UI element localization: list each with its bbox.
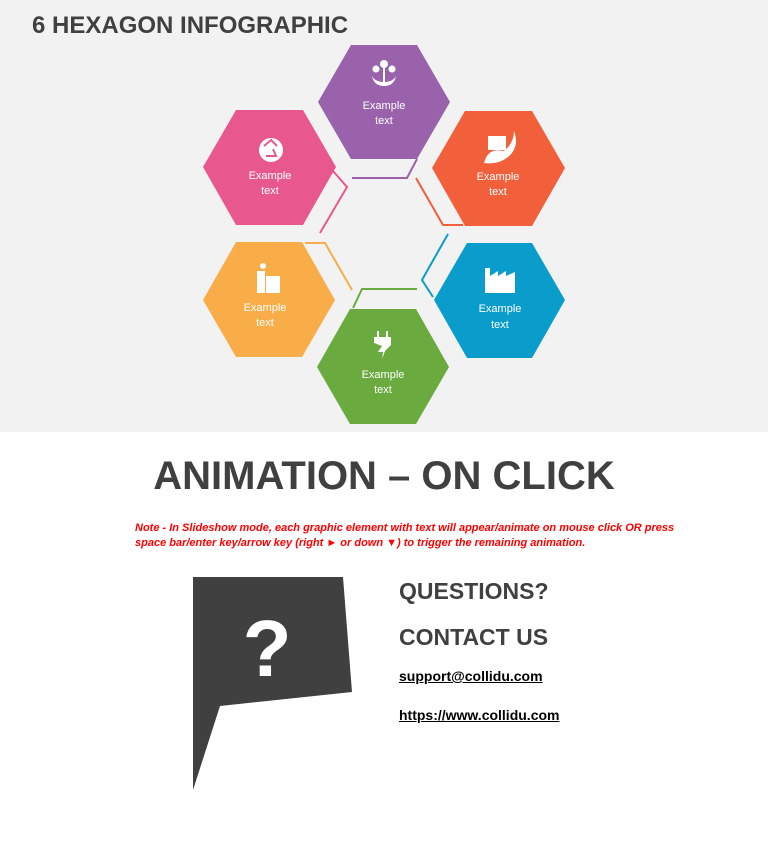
icon: chocolate leaf bbox=[484, 131, 516, 163]
icon: question speech bubble: ? bbox=[243, 604, 291, 693]
contact block: CONTACT US bbox=[399, 624, 548, 650]
hexagon: purple bbox=[318, 45, 450, 159]
heading: animation: ANIMATION – ON CLICK bbox=[153, 454, 615, 498]
contact block bbox=[399, 578, 560, 723]
hexagon: purple: Example bbox=[363, 100, 405, 112]
connector: pink bbox=[320, 171, 347, 233]
hexagon diagram bbox=[203, 45, 565, 424]
hexagon: green: text bbox=[374, 384, 392, 396]
contact block: support@collidu.com bbox=[399, 668, 543, 684]
hexagon: green bbox=[317, 309, 449, 424]
icon: factory bbox=[485, 268, 515, 293]
hexagon: yellow: Example bbox=[244, 302, 286, 314]
connector: purple bbox=[352, 159, 417, 178]
hexagon: pink bbox=[203, 110, 336, 225]
hexagon: green: Example bbox=[362, 369, 404, 381]
hexagon: yellow bbox=[203, 242, 335, 357]
icon: recycle bbox=[259, 138, 283, 162]
connector: green bbox=[353, 289, 417, 308]
hexagon: orange: text bbox=[489, 186, 507, 198]
hexagon: yellow: text bbox=[256, 317, 274, 329]
icon: plant hands bbox=[372, 60, 396, 86]
hexagon: blue: Example bbox=[479, 303, 521, 315]
title: 6 HEXAGON INFOGRAPHIC bbox=[32, 12, 348, 39]
hexagon: pink: Example bbox=[249, 170, 291, 182]
note text: Note - In Slideshow mode, each graphic element with text will appear/animate on mouse click OR press space bar/enter key/arrow key (right ► or down ▼) to trigger the remaining animation. bbox=[135, 522, 674, 549]
hexagon: blue: text bbox=[491, 319, 509, 331]
hexagon: purple: text bbox=[375, 115, 393, 127]
connector: blue bbox=[422, 234, 448, 297]
hexagon: orange bbox=[432, 111, 565, 226]
hexagon: orange: Example bbox=[477, 171, 519, 183]
icon: person bin bbox=[257, 263, 280, 293]
icon: question speech bubble bbox=[193, 577, 352, 790]
connector: yellow bbox=[305, 243, 352, 290]
top panel background bbox=[0, 0, 768, 432]
hexagon: pink: text bbox=[261, 185, 279, 197]
contact block: https://www.collidu.com bbox=[399, 707, 559, 723]
connector: orange bbox=[416, 178, 463, 225]
contact block: QUESTIONS? bbox=[399, 578, 549, 604]
icon: plug bolt bbox=[374, 331, 391, 359]
hexagon: blue bbox=[434, 243, 565, 358]
